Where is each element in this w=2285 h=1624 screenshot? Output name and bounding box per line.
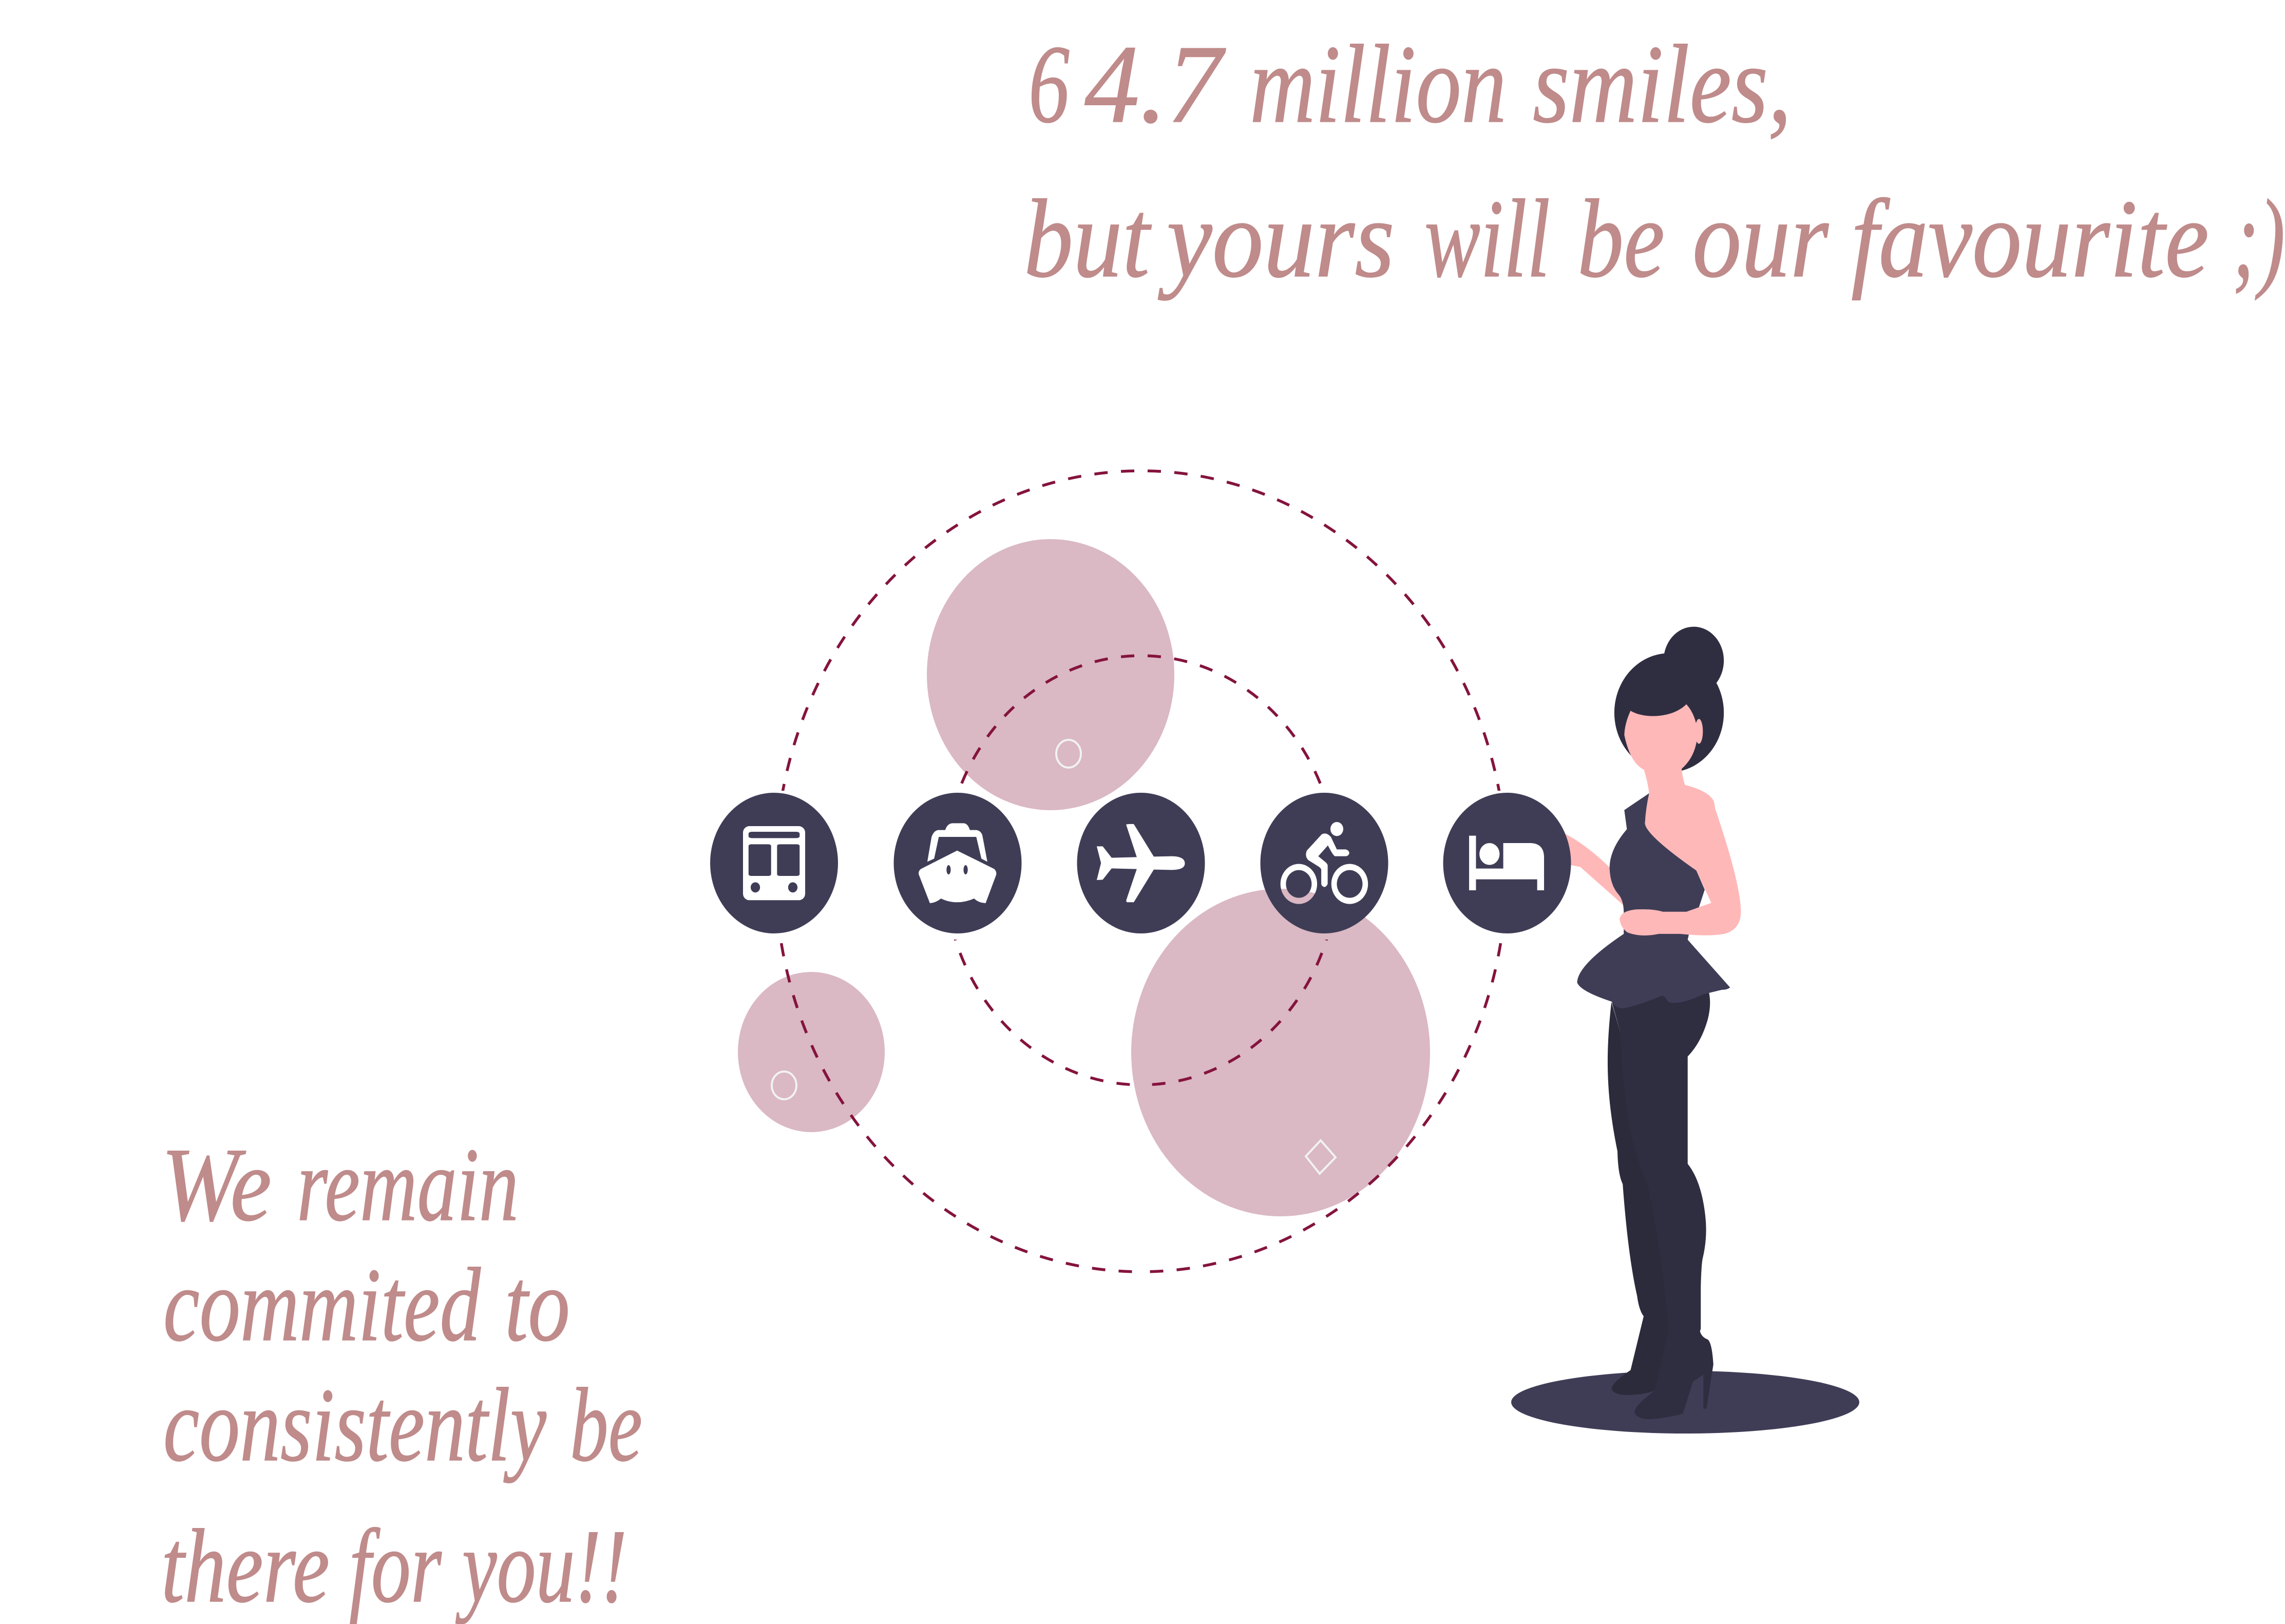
- figure: woman: [1565, 627, 1741, 1419]
- icon: bed: [1443, 793, 1571, 933]
- dashed orbit rings: [775, 471, 1507, 1272]
- heading: 64.7 million smiles: be: [1577, 177, 1665, 301]
- icon: cyclist: [1260, 793, 1388, 933]
- icon: train: [710, 793, 838, 933]
- text block: commitment message: there: [161, 1508, 330, 1624]
- pink blob: top: [927, 539, 1174, 810]
- pink blob: bottom left: [738, 972, 885, 1132]
- hair: [1614, 627, 1724, 772]
- text block: commitment message: to: [505, 1247, 570, 1363]
- marker: ring on left blob: [772, 1072, 796, 1099]
- text block: commitment message: consistently: [163, 1367, 547, 1483]
- far arm: [1565, 834, 1624, 905]
- dress: [1577, 793, 1730, 1008]
- heading: 64.7 million smiles: our: [1692, 177, 1829, 301]
- text block: commitment message: [161, 1126, 642, 1624]
- pink blob: bottom right: [1131, 889, 1430, 1216]
- heading: 64.7 million smiles: [1024, 23, 2285, 301]
- heading: 64.7 million smiles: 6: [1029, 23, 1070, 146]
- skin: face, shoulder and arm: [1620, 704, 1741, 935]
- heading: 64.7 million smiles: 4.7: [1084, 23, 1226, 146]
- marker: ring on top blob: [1056, 740, 1081, 768]
- heading: 64.7 million smiles: million: [1250, 23, 1507, 146]
- icon: ship: [893, 793, 1022, 933]
- heading: 64.7 million smiles: but: [1024, 177, 1152, 301]
- ground shadow: [1511, 1371, 1859, 1434]
- text block: commitment message: you!!: [455, 1508, 627, 1624]
- text block: commitment message: for: [349, 1508, 442, 1624]
- text block: commitment message: be: [570, 1367, 642, 1483]
- text block: commitment message: We: [161, 1126, 272, 1243]
- heading: 64.7 million smiles: favourite: [1851, 177, 2209, 301]
- heading: 64.7 million smiles: smiles,: [1533, 23, 1792, 146]
- text block: commitment message: remain: [297, 1126, 519, 1243]
- heading: 64.7 million smiles: will: [1424, 177, 1550, 301]
- heading: 64.7 million smiles: yours: [1158, 177, 1395, 301]
- marker: diamond on right blob: [1306, 1140, 1336, 1174]
- legs: [1608, 991, 1713, 1419]
- icon: airplane: [1077, 793, 1205, 933]
- ear: [1695, 719, 1703, 744]
- text block: commitment message: commited: [163, 1247, 481, 1363]
